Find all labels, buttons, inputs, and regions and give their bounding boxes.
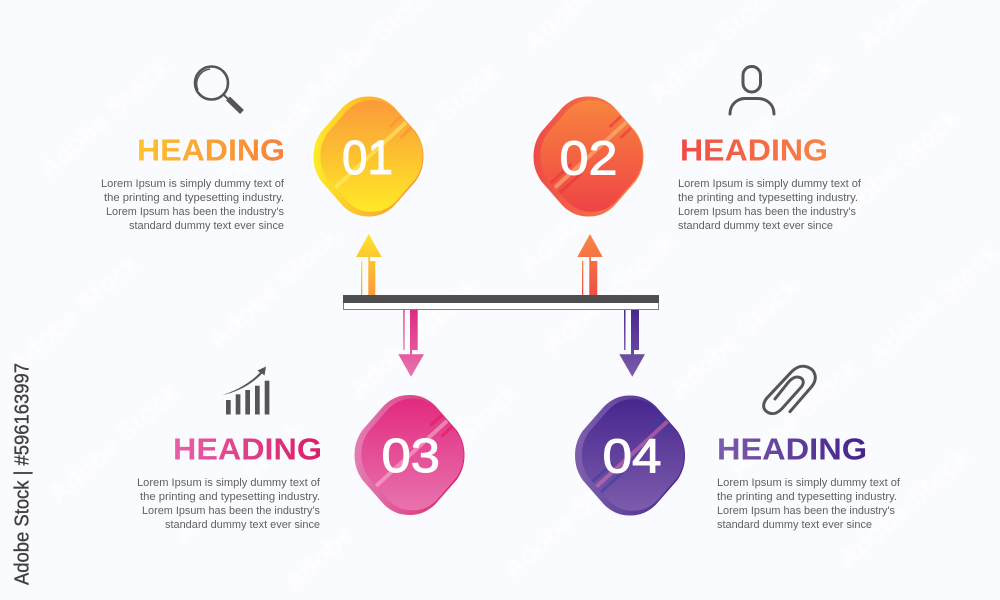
arrow down 03: [398, 310, 424, 377]
arrow down 04: [619, 310, 645, 377]
watermark pattern: Adobe Stock: [698, 51, 841, 185]
text block 02: Lorem Ipsum has been the industry's: [678, 206, 856, 218]
watermark pattern: Adobe Stock: [383, 376, 526, 510]
text block 04: the printing and typesetting industry.: [717, 491, 897, 503]
text block 02: [678, 178, 862, 232]
text block 01: the printing and typesetting industry.: [104, 192, 284, 204]
watermark pattern: Adobe Stock: [3, 246, 146, 380]
text block 01: Lorem Ipsum is simply dummy text of: [101, 178, 285, 190]
watermark pattern: Adobe Stock: [538, 226, 681, 360]
arrow up 01: [356, 234, 382, 295]
icon: growth chart: [222, 366, 269, 414]
central bar: [343, 295, 659, 310]
text block 01: standard dummy text ever since: [129, 220, 284, 232]
text block 03: [137, 477, 321, 531]
badge 02: 02: [560, 132, 618, 186]
badge 04: [575, 396, 685, 516]
watermark pattern: Adobe: [278, 519, 360, 598]
watermark pattern: Adobe Stock: [663, 271, 806, 405]
watermark pattern: Adobe Stock: [33, 51, 176, 185]
badge 01: 01: [342, 132, 393, 185]
heading 04: HEADING: [717, 432, 867, 466]
text block 03: Lorem Ipsum has been the industry's: [142, 505, 320, 517]
badge 02: [534, 96, 644, 216]
watermark pattern: Adobe Stock: [513, 146, 656, 280]
text block 03: Lorem Ipsum is simply dummy text of: [137, 477, 321, 489]
panel: step 02: [534, 66, 862, 295]
watermark pattern: Adobe Stock: [343, 271, 486, 405]
text block 03: the printing and typesetting industry.: [140, 491, 320, 503]
text block 02: standard dummy text ever since: [678, 220, 833, 232]
badge 04: 04: [602, 430, 662, 484]
watermark pattern: Adobe Stock: [203, 221, 346, 355]
watermark pattern: Adobe Stock: [43, 376, 186, 510]
panel: step 01: [101, 66, 424, 295]
text block 01: Lorem Ipsum has been the industry's: [106, 206, 284, 218]
text block 04: Lorem Ipsum has been the industry's: [717, 505, 895, 517]
icon: magnifying glass: [195, 66, 242, 112]
badge 03: [354, 395, 464, 515]
watermark pattern: Adobe Stock: [363, 56, 506, 190]
watermark pattern: Adobe Stock: [833, 441, 976, 575]
heading 03: HEADING: [173, 432, 322, 466]
text block 02: the printing and typesetting industry.: [678, 192, 858, 204]
text block 04: [717, 477, 901, 531]
text block 01: [101, 178, 285, 232]
text block 03: standard dummy text ever since: [165, 519, 320, 531]
text block 02: Lorem Ipsum is simply dummy text of: [678, 178, 862, 190]
text block 04: Lorem Ipsum is simply dummy text of: [717, 477, 901, 489]
text block 04: standard dummy text ever since: [717, 519, 872, 531]
watermark pattern: Adobe Stock: [178, 91, 321, 225]
panel: step 03: [137, 310, 464, 531]
stock id label: Adobe Stock | #596163997: [12, 363, 34, 585]
watermark pattern: Adobe Stock: [168, 416, 311, 550]
watermark pattern: Adobe Stock: [723, 351, 866, 485]
panel: step 04: [575, 310, 901, 531]
icon: paperclip: [764, 366, 815, 414]
heading 01: HEADING: [137, 132, 285, 168]
arrow up 02: [577, 234, 603, 295]
icon: person: [730, 66, 774, 114]
heading 02: HEADING: [680, 132, 828, 168]
badge 01: [314, 96, 424, 216]
watermark pattern: Adobe Stock: [498, 451, 641, 585]
watermark pattern: Adobe Stock: [823, 101, 966, 235]
badge 03: 03: [382, 430, 440, 483]
